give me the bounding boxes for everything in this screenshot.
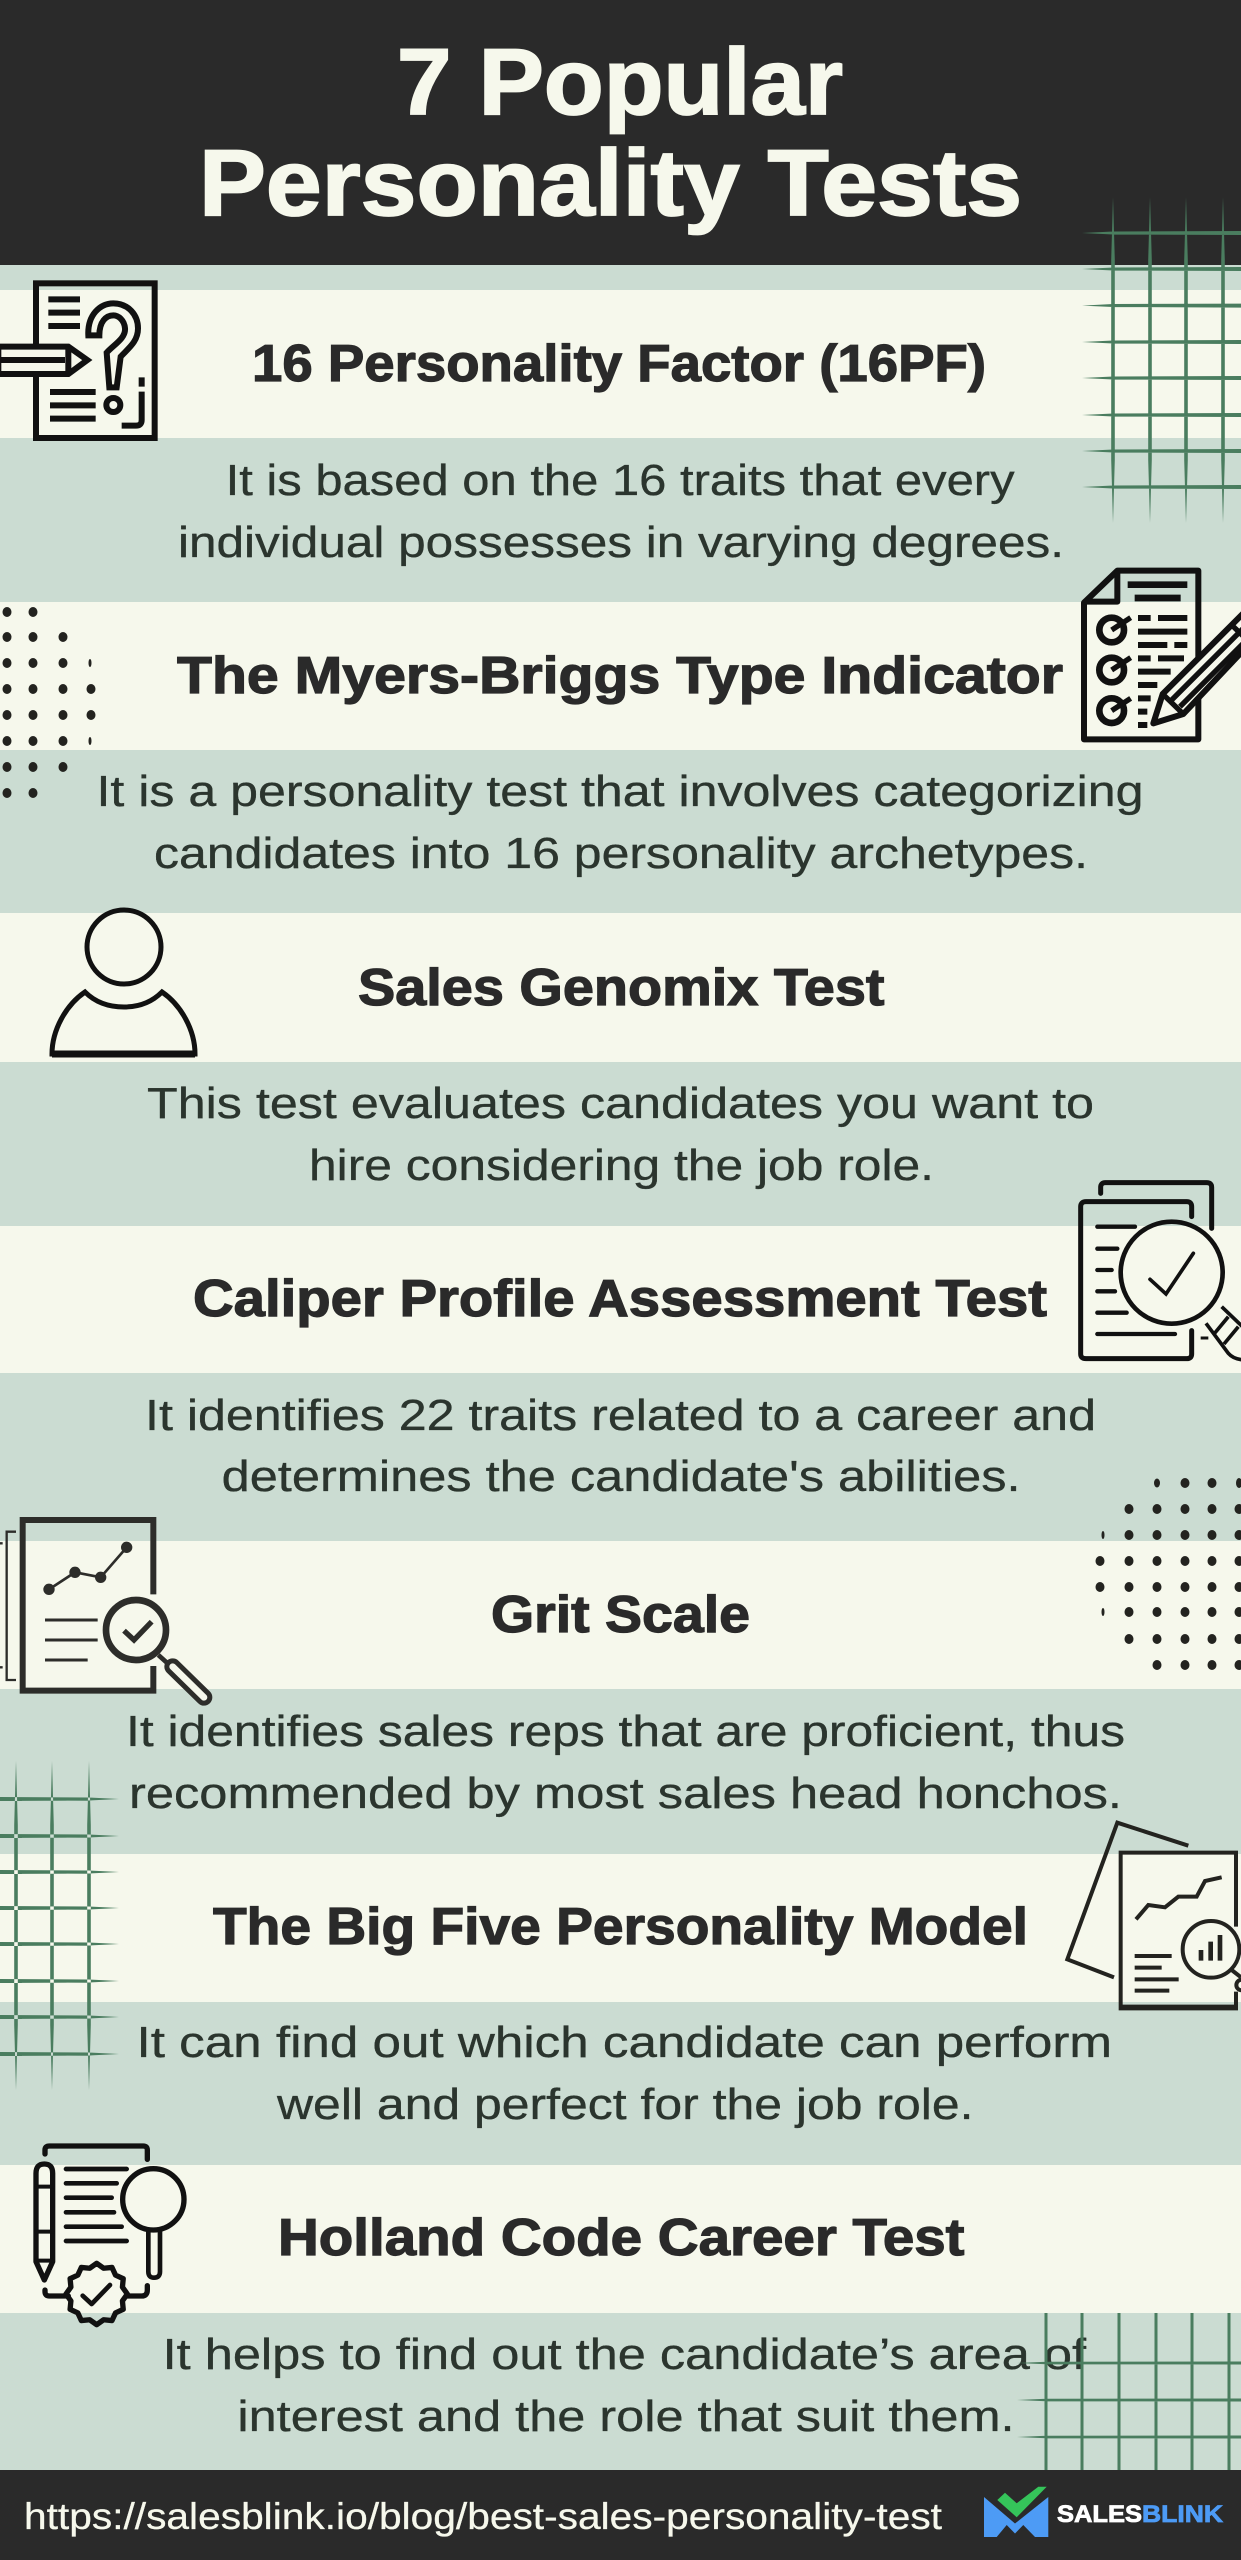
description	[145, 1391, 1096, 1501]
icon: question sheet with pencil	[0, 283, 155, 438]
description	[163, 2330, 1087, 2441]
panel: Holland Code	[0, 2146, 1241, 2441]
panel: Myers-Briggs	[0, 571, 1241, 878]
title line 2: Personality Tests	[199, 130, 1022, 235]
footer	[0, 2470, 1241, 2560]
logo: SalesBlink: BLINK	[1142, 2501, 1224, 2528]
heading: Grit Scale	[491, 1586, 750, 1644]
description	[147, 1079, 1094, 1190]
heading: Caliper Profile Assessment Test	[193, 1270, 1047, 1328]
icon: charts with magnifier	[1067, 1823, 1241, 2008]
panel: Big Five	[0, 1823, 1241, 2129]
description: It is based on the 16 traits that every	[226, 456, 1015, 505]
description	[178, 456, 1064, 567]
description: determines the candidate's abilities.	[222, 1452, 1021, 1501]
icon: person	[52, 910, 195, 1054]
logo: SalesBlink: SALES	[1057, 2501, 1142, 2528]
description: hire considering the job role.	[309, 1141, 934, 1190]
description: This test evaluates candidates you want to	[147, 1079, 1094, 1128]
dotted circle decoration: right	[1096, 1478, 1241, 1670]
grid decoration: bottom right	[1017, 2313, 1241, 2470]
description: individual possesses in varying degrees.	[178, 518, 1064, 567]
panel: Caliper	[0, 1183, 1241, 1501]
heading: Sales Genomix Test	[358, 959, 884, 1017]
description: It identifies 22 traits related to a career and	[145, 1391, 1096, 1440]
grid decoration: left	[0, 1761, 119, 2090]
description	[126, 1707, 1125, 1818]
heading: Holland Code Career Test	[278, 2209, 964, 2267]
icon: report with magnifier	[0, 1520, 204, 1697]
panel: 16 Personality Factor	[0, 283, 1241, 567]
description: It helps to find out the candidate’s area of	[163, 2330, 1087, 2379]
heading: The Big Five Personality Model	[213, 1898, 1028, 1956]
description	[136, 2018, 1112, 2129]
description: well and perfect for the job role.	[276, 2080, 973, 2129]
grid decoration: top right	[1082, 197, 1241, 523]
description: It can find out which candidate can perform	[136, 2018, 1112, 2067]
logo: SalesBlink	[984, 2487, 1224, 2537]
description: It identifies sales reps that are proficient, thus	[126, 1707, 1125, 1756]
title line 1: 7 Popular	[397, 29, 843, 134]
description: recommended by most sales head honchos.	[129, 1769, 1122, 1818]
icon: checklist with pencil	[1084, 571, 1241, 739]
heading: 16 Personality Factor (16PF)	[252, 335, 986, 393]
panel: Grit Scale	[0, 1520, 1241, 1818]
icon: document, pencil, magnifier and badge	[36, 2146, 184, 2325]
source url: https://salesblink.io/blog/best-sales-personality-test	[24, 2496, 943, 2537]
dotted circle decoration: left	[2, 607, 96, 798]
description	[96, 767, 1144, 878]
description: candidates into 16 personality archetypes.	[154, 829, 1088, 878]
description: interest and the role that suit them.	[237, 2392, 1015, 2441]
icon: documents with magnifier	[1081, 1183, 1241, 1360]
header	[0, 0, 1241, 265]
description: It is a personality test that involves categorizing	[96, 767, 1144, 816]
heading: The Myers-Briggs Type Indicator	[177, 647, 1063, 705]
panel: Sales Genomix	[0, 910, 1241, 1190]
